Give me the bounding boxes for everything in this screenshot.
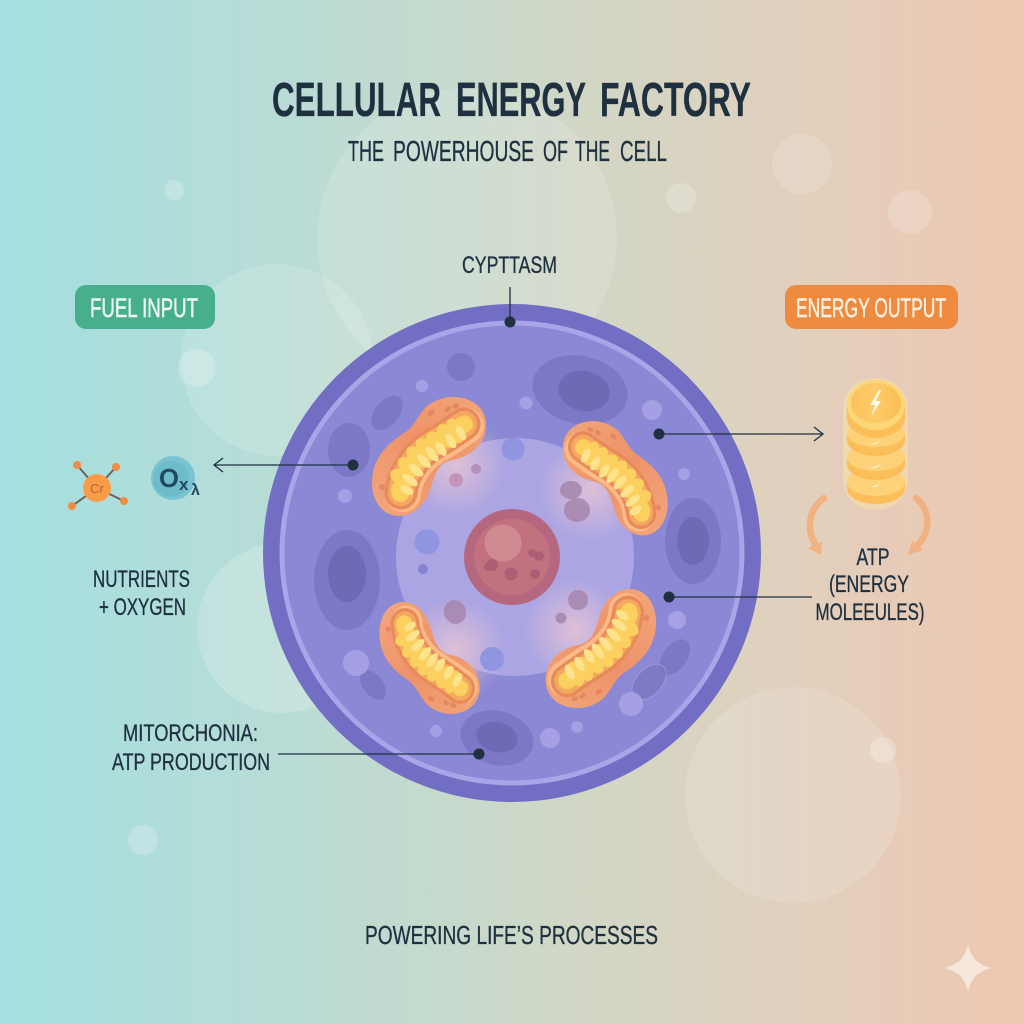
- badge: energy output: [785, 285, 958, 329]
- subtitle: THE: [575, 136, 610, 168]
- text: nutrients plus oxygen: [93, 566, 190, 621]
- title: CELLULAR: [272, 74, 441, 127]
- mitochondrion: bottom right: [546, 589, 656, 708]
- text: ATP energy molecules: ATP: [856, 544, 890, 571]
- text: mitochondria label: MITORCHONIA:: [123, 720, 258, 747]
- arrow: fuel into cell: [214, 458, 358, 472]
- text: ATP energy molecules: [816, 544, 924, 626]
- title: FACTORY: [600, 74, 751, 127]
- text: mitochondria label: [112, 720, 270, 776]
- icon: nutrient molecule: Cr: [90, 481, 105, 496]
- arrow: right cycle arrow: [908, 498, 927, 555]
- text: mitochondria label: ATP PRODUCTION: [112, 749, 270, 776]
- badge: fuel input: FUEL INPUT: [90, 293, 198, 323]
- nuclear zone: [396, 438, 634, 676]
- text: ATP energy molecules: MOLEEULES): [816, 599, 924, 626]
- icon: sparkle: [944, 944, 992, 992]
- subtitle: CELL: [620, 136, 667, 168]
- icon: ATP coin stack: [843, 378, 908, 510]
- mitochondrion: top right: [563, 421, 668, 535]
- text: nutrients plus oxygen: + OXYGEN: [99, 594, 186, 621]
- subtitle: OF: [543, 136, 568, 168]
- cell diagram: [263, 304, 761, 802]
- icon: oxygen molecule: O: [159, 463, 179, 493]
- badge: fuel input: [75, 285, 215, 329]
- icon: nutrient molecule: [68, 461, 128, 510]
- subtitle: THE: [348, 136, 384, 168]
- pink glows: [403, 413, 642, 702]
- decorative background bubbles: [128, 88, 932, 903]
- mitochondrion: top left: [372, 397, 486, 516]
- cytoplasm: [282, 323, 742, 783]
- title: [272, 74, 751, 127]
- text: ATP energy molecules: (ENERGY: [829, 571, 909, 598]
- badge: energy output: ENERGY OUTPUT: [796, 293, 946, 323]
- leader: cytoplasm: [504, 287, 516, 328]
- footer caption: POWERING LIFE’S PROCESSES: [365, 920, 658, 950]
- title: ENERGY: [456, 74, 586, 127]
- label: cytoplasm: CYPTTASM: [462, 252, 557, 279]
- icon: oxygen molecule: λ: [191, 482, 200, 499]
- icon: oxygen molecule: x: [179, 475, 189, 494]
- arrow: left cycle arrow: [808, 498, 824, 555]
- inner vesicles: [414, 438, 590, 671]
- icon: oxygen molecule: [151, 456, 200, 500]
- dark organelles: [314, 347, 721, 773]
- mitochondrion: bottom left: [379, 602, 480, 714]
- cell membrane: [263, 304, 761, 802]
- small vesicles: [338, 380, 690, 748]
- subtitle: POWERHOUSE: [393, 136, 534, 168]
- leader: mitochondria: [278, 748, 484, 760]
- arrow: energy out of cell: [654, 427, 823, 441]
- subtitle: [348, 136, 667, 168]
- leader: ATP: [664, 592, 812, 602]
- text: nutrients plus oxygen: NUTRIENTS: [93, 566, 190, 593]
- nucleus: [464, 509, 560, 605]
